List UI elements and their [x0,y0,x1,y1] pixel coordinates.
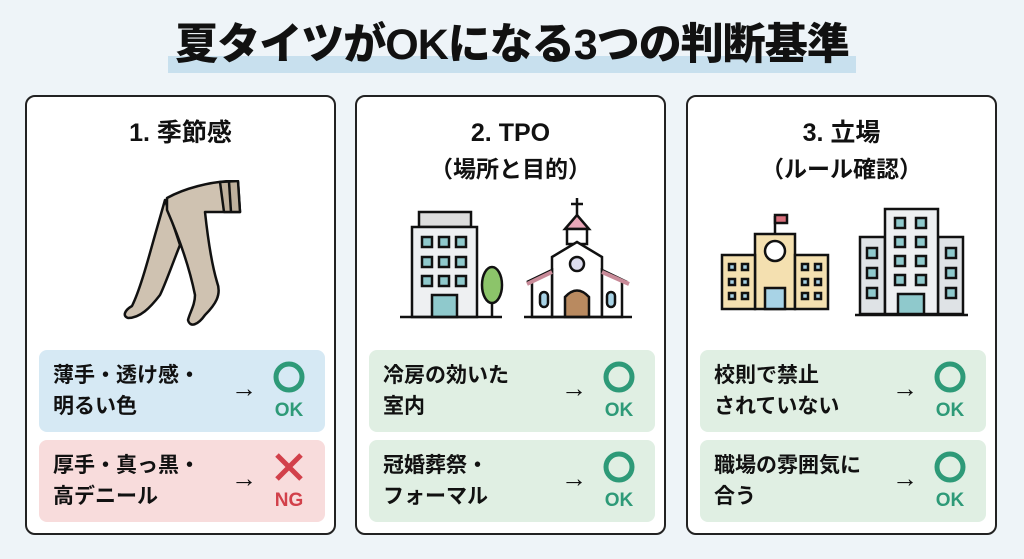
title: 夏タイツがOKになる3つの判断基準 [175,21,849,69]
heading 1: 1. 季節感 [129,119,232,147]
row: ok: 合う [714,485,756,508]
row: ok [369,350,655,432]
row: ok: されていない [714,395,839,418]
panel: TPO [355,95,666,535]
panel: season [25,95,336,535]
row: ok [700,350,986,432]
row: ng [39,440,325,522]
row: ok: OK [605,400,633,421]
heading 3 [761,119,922,182]
row: ok: OK [936,490,964,511]
row: ok [39,350,325,432]
row: ok: → [231,373,257,403]
row: ok: 薄手・透け感・ [53,364,200,387]
panel: position [686,95,997,535]
heading 3: 3. 立場 [803,119,880,147]
row: ok: 冠婚葬祭・ [383,454,488,477]
icon: office and church [400,198,632,318]
row: ok: OK [936,400,964,421]
row: ok: → [561,373,587,403]
row: ok: OK [605,490,633,511]
heading 2: 2. TPO [471,119,550,147]
row: ng: → [231,463,257,493]
row: ok: → [892,373,918,403]
row: ok: 明るい色 [53,395,137,418]
row: ok [369,440,655,522]
icon: legs [124,180,242,326]
row: ok: 校則で禁止 [714,364,819,387]
row: ok: → [892,463,918,493]
row: ng: 厚手・真っ黒・ [53,454,200,477]
row: ok [700,440,986,522]
row: ok: 室内 [383,395,425,418]
heading 2 [430,119,591,182]
row: ok: フォーマル [383,485,488,508]
heading 3: （ルール確認） [761,156,922,182]
row: ng: NG [275,490,303,511]
row: ok: OK [275,400,303,421]
row: ok: → [561,463,587,493]
row: ok: 職場の雰囲気に [714,454,861,477]
heading 2: （場所と目的） [430,156,591,182]
row: ok: 冷房の効いた [383,364,509,387]
row: ng: 高デニール [53,485,158,508]
icon: school and office [720,208,968,316]
